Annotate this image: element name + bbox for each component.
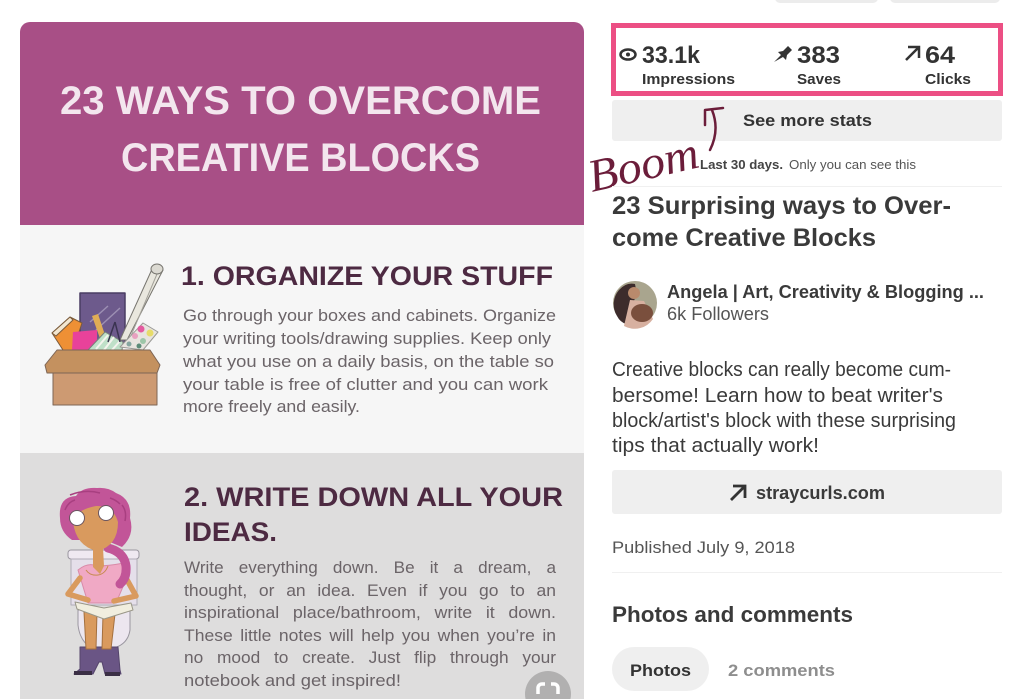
text block: section 2 body xyxy=(184,559,557,690)
title: 23 WAYS TO OVERCOME xyxy=(60,79,541,123)
text block: last 30 days: Last 30 days. xyxy=(700,158,783,172)
pin title xyxy=(612,192,951,252)
heading: section 1: 1. ORGANIZE YOUR STUFF xyxy=(181,261,553,291)
pin title: 23 Surprising ways to Over- xyxy=(612,192,951,220)
stat: impressions xyxy=(642,42,735,88)
tab: comments: 2 comments xyxy=(728,661,835,680)
text block: section 2 body: Write everything down. Be it a dream, a xyxy=(184,559,557,577)
text block: section 1 body: what you use on a daily basis, on the table so xyxy=(182,353,554,371)
text block: section 1 body: more freely and easily. xyxy=(183,398,360,416)
panel: infographic pin xyxy=(20,22,584,699)
text block: section 2 body: no mood to create. Just flip through your xyxy=(184,649,557,667)
heading: photos and comments: Photos and comments xyxy=(612,602,853,627)
stat: clicks: Clicks xyxy=(925,71,971,88)
top buttons xyxy=(775,0,1000,3)
stat: impressions: 33.1k xyxy=(642,42,701,69)
panel: section 1 background xyxy=(20,225,584,453)
button: see more stats xyxy=(612,100,1002,141)
stat: saves xyxy=(797,42,841,88)
text block: section 1 body: your table is free of clutter and you can work xyxy=(183,376,549,394)
text block: description: tips that actually work! xyxy=(612,435,819,457)
panel: stats highlight box xyxy=(614,26,1000,94)
stat: clicks xyxy=(925,42,971,88)
icon: arrow xyxy=(906,47,919,60)
heading: section 2 xyxy=(184,482,563,547)
stat: clicks: 64 xyxy=(925,42,956,69)
text block: section 2 body: notebook and get inspired! xyxy=(184,672,401,690)
pin title: come Creative Blocks xyxy=(612,224,876,252)
stat: impressions: Impressions xyxy=(642,71,735,88)
icon: expand button xyxy=(525,671,571,699)
text block: description: Creative blocks can really become cum- xyxy=(612,359,951,381)
stat: saves: 383 xyxy=(797,42,840,69)
button: see more stats: See more stats xyxy=(743,111,872,130)
icon: girl reading on toilet xyxy=(60,488,139,676)
text block: section 2 body: thought, or an idea. Even if you go to an xyxy=(184,582,556,600)
stat: saves: Saves xyxy=(797,71,841,88)
annotation: handwritten boom: Boom xyxy=(583,127,703,202)
author xyxy=(667,282,984,324)
tab: photos: Photos xyxy=(630,661,691,680)
text block: last 30 days: Only you can see this xyxy=(789,158,916,172)
icon: eye xyxy=(620,50,636,60)
title xyxy=(60,79,541,180)
text block: section 1 body xyxy=(182,307,556,416)
panel: section 2 background xyxy=(20,453,584,699)
button: website link xyxy=(612,470,1002,514)
icon: pin xyxy=(774,46,792,62)
text block: section 2 body: These little notes will help you when you’re in xyxy=(184,627,556,645)
text: published date: Published July 9, 2018 xyxy=(612,538,795,557)
text block: section 1 body: your writing tools/drawing supplies. Keep only xyxy=(183,330,552,348)
button: website link: straycurls.com xyxy=(756,483,885,503)
panel: title banner xyxy=(20,22,584,225)
text block: description: bersome! Learn how to beat writer's xyxy=(612,385,943,407)
icon: box of art supplies xyxy=(45,264,163,405)
text block: description: block/artist's block with these surprising xyxy=(612,410,956,432)
text block: section 1 body: Go through your boxes and cabinets. Organize xyxy=(183,307,556,325)
author: 6k Followers xyxy=(667,304,769,324)
author: Angela | Art, Creativity & Blogging ... xyxy=(667,282,984,302)
text block: section 2 body: inspirational place/bathroom, write it down. xyxy=(184,604,556,622)
text block: last 30 days xyxy=(700,158,916,172)
arrow: boom pointer xyxy=(705,108,723,150)
tab: photos xyxy=(612,647,709,691)
heading: section 2: IDEAS. xyxy=(184,517,277,547)
heading: section 2: 2. WRITE DOWN ALL YOUR xyxy=(184,482,563,512)
icon: author avatar xyxy=(613,281,657,329)
text block: description xyxy=(612,359,956,457)
title: CREATIVE BLOCKS xyxy=(121,136,480,180)
